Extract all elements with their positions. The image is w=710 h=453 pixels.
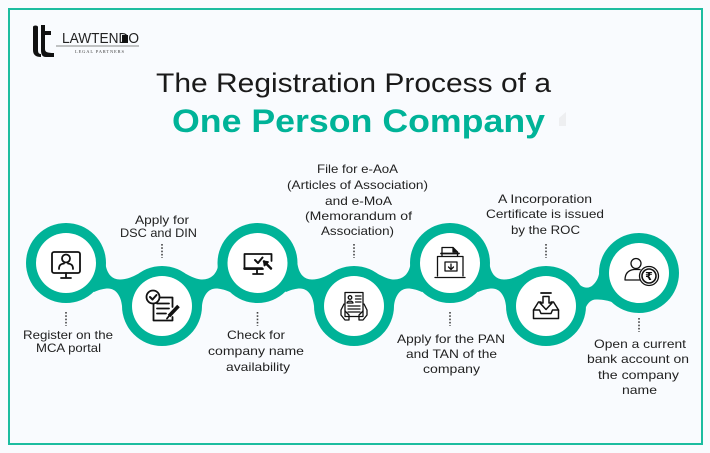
step 2: apply for DSC and DIN: Apply for bbox=[135, 213, 189, 227]
step 7: open a current bank account: name bbox=[622, 383, 657, 397]
icon: laptop with file bbox=[435, 248, 465, 278]
step 3: check for company name availability: Check for bbox=[227, 328, 285, 342]
icon: monitor with user bbox=[52, 252, 80, 278]
step 4: file for e-AoA and e-MoA: (Articles of Association) bbox=[287, 178, 428, 192]
step 4: file for e-AoA and e-MoA: Association) bbox=[321, 224, 394, 238]
step 6: incorporation certificate issued: Certificate is issued bbox=[486, 207, 604, 221]
step 3: check for company name availability: company name bbox=[208, 344, 304, 358]
title bbox=[156, 68, 552, 139]
logo: LAWTENDO bbox=[62, 31, 139, 47]
step 3: check for company name availability: availability bbox=[226, 360, 290, 374]
step 7: open a current bank account: ₹ bbox=[645, 270, 653, 283]
step 6: incorporation certificate issued bbox=[486, 192, 604, 336]
logo bbox=[33, 25, 139, 57]
step 5: apply for PAN and TAN: and TAN of the bbox=[406, 347, 497, 361]
title: One Person Company bbox=[172, 103, 545, 139]
step 6: incorporation certificate issued: A Incorporation bbox=[498, 192, 592, 206]
step 2: apply for DSC and DIN bbox=[120, 213, 197, 336]
icon: person with rupee coin bbox=[625, 258, 658, 286]
step 5: apply for PAN and TAN: Apply for the PAN bbox=[397, 332, 505, 346]
step 4: file for e-AoA and e-MoA: and e-MoA bbox=[325, 194, 392, 208]
step 1: register on the MCA portal: Register on the bbox=[23, 328, 113, 342]
step 5: apply for PAN and TAN bbox=[397, 233, 505, 376]
step 4: file for e-AoA and e-MoA bbox=[287, 162, 428, 336]
faint mark bbox=[559, 112, 566, 126]
icon: monitor with check and cursor bbox=[244, 254, 272, 274]
step 2: apply for DSC and DIN: DSC and DIN bbox=[120, 226, 197, 240]
process timeline ribbon bbox=[26, 223, 679, 346]
step 7: open a current bank account bbox=[587, 243, 689, 397]
step 6: incorporation certificate issued: by the ROC bbox=[511, 223, 580, 237]
step 3: check for company name availability bbox=[208, 233, 304, 374]
step 7: open a current bank account: the company bbox=[598, 368, 679, 382]
step 4: file for e-AoA and e-MoA: File for e-AoA bbox=[317, 162, 398, 176]
icon: inbox tray with down arrow bbox=[534, 293, 558, 318]
step 5: apply for PAN and TAN: company bbox=[423, 362, 480, 376]
step 7: open a current bank account: bank account on bbox=[587, 352, 689, 366]
icon: document with badge and pencil bbox=[146, 290, 178, 320]
step 1: register on the MCA portal bbox=[23, 233, 113, 355]
icon: hands holding document bbox=[341, 292, 367, 320]
title: The Registration Process of a bbox=[156, 68, 552, 98]
logo: LEGAL PARTNERS bbox=[75, 49, 124, 54]
step 1: register on the MCA portal: MCA portal bbox=[36, 341, 101, 355]
step 4: file for e-AoA and e-MoA: (Memorandum of bbox=[305, 209, 413, 223]
step 7: open a current bank account: Open a current bbox=[594, 337, 687, 351]
